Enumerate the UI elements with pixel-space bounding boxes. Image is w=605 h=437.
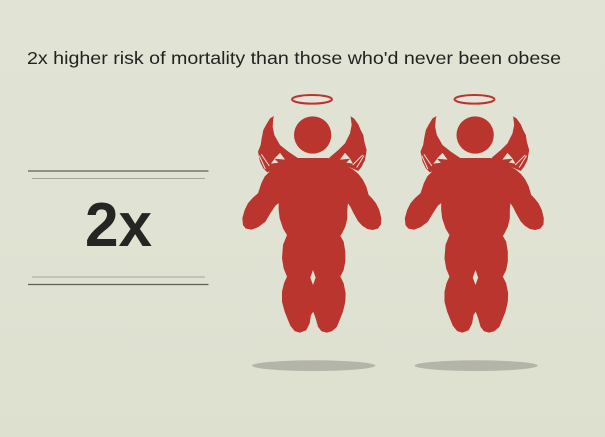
figure: angel two — [405, 95, 543, 371]
figure: angel one — [243, 95, 381, 371]
halo — [292, 95, 332, 104]
wing feather gaps — [259, 154, 364, 169]
head — [456, 116, 494, 154]
leg gap — [310, 270, 316, 285]
head — [294, 116, 331, 154]
halo — [454, 95, 494, 104]
body — [243, 158, 381, 332]
body — [405, 158, 543, 332]
wing feather gaps — [422, 154, 526, 169]
ground shadow — [252, 360, 375, 371]
wings — [258, 116, 367, 172]
wings — [420, 116, 529, 172]
ground shadow — [414, 360, 538, 371]
stat value: 2x — [85, 191, 152, 260]
leg gap — [473, 270, 478, 285]
title: 2x higher risk of mortality than those who'd never been obese — [27, 48, 561, 68]
